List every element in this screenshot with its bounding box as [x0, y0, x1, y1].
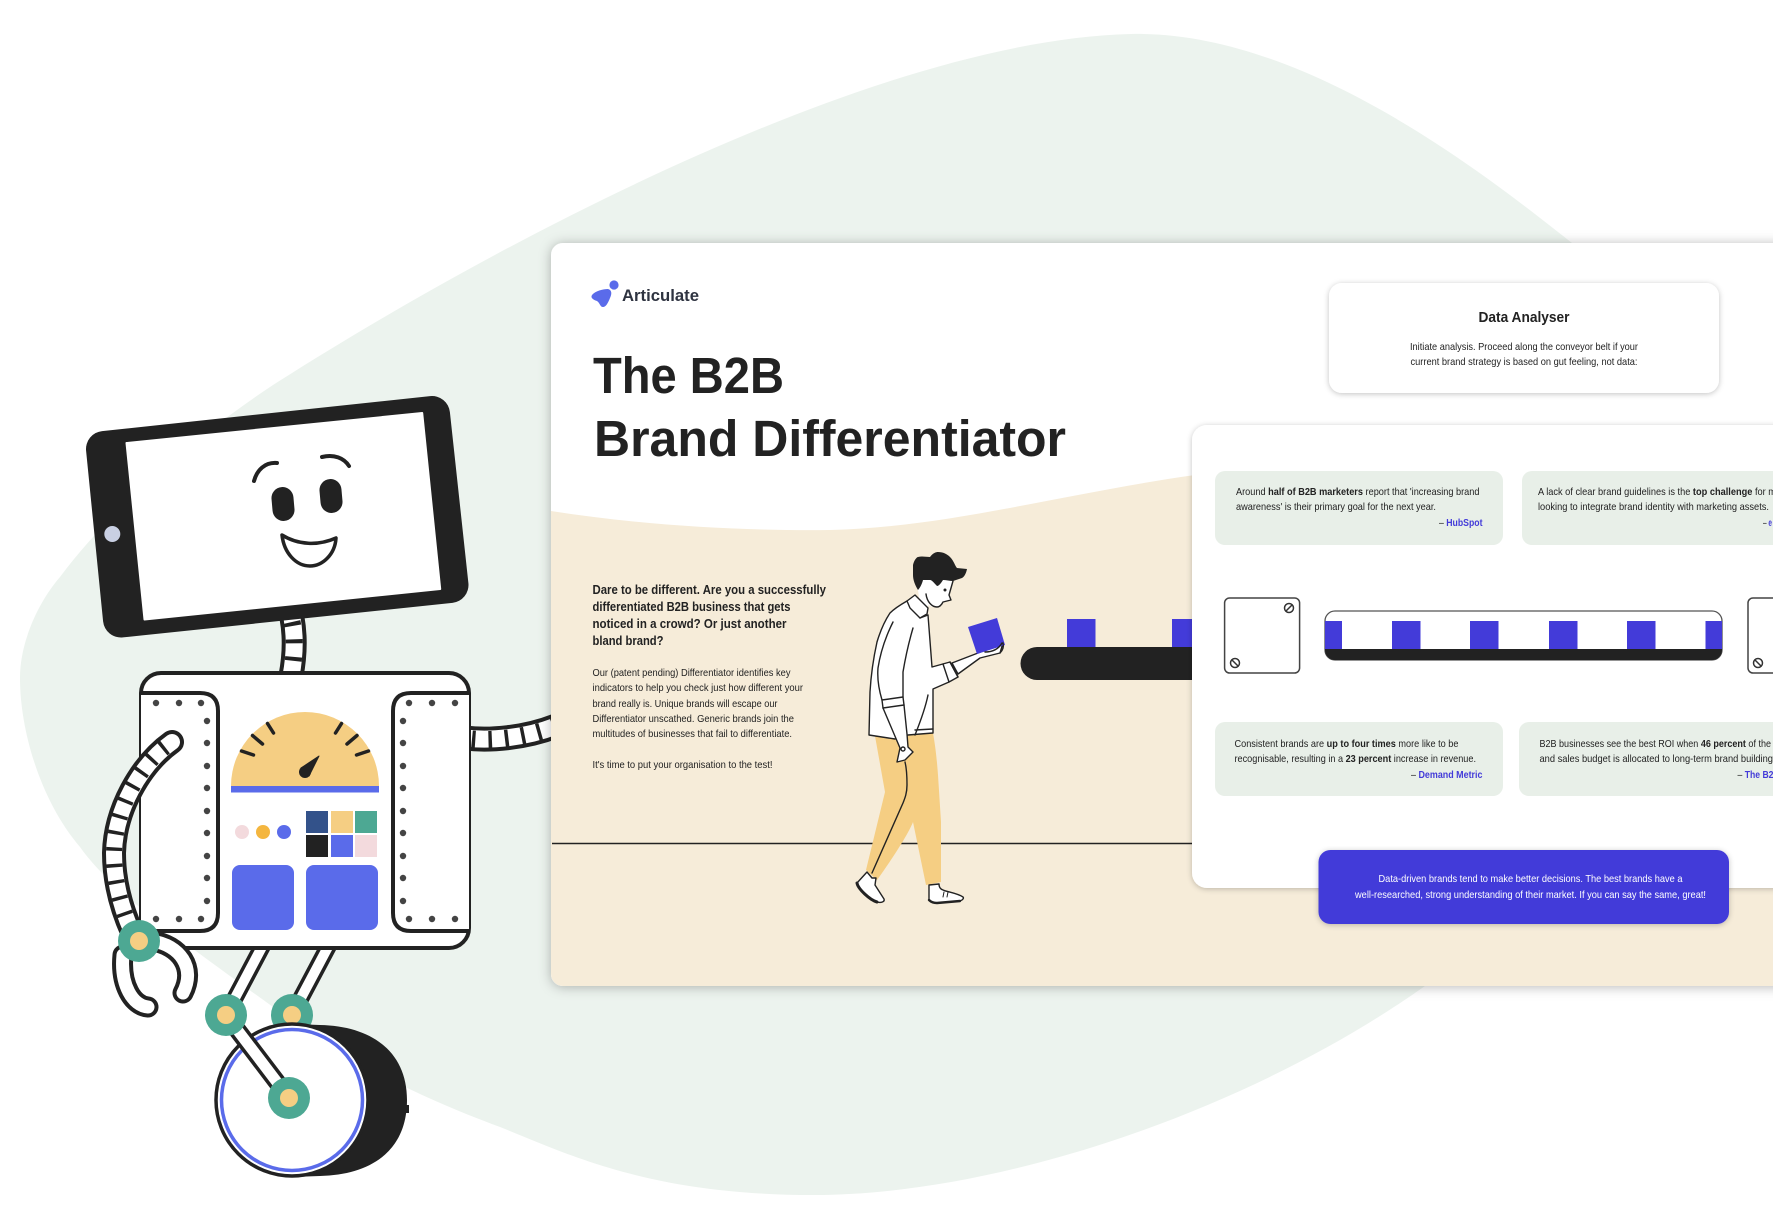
card text: current brand strategy is based on gut feeling, not data:	[1410, 356, 1638, 368]
title	[593, 347, 1066, 467]
intro lead text: differentiated B2B business that gets	[592, 599, 790, 614]
stat box: HubSpot: Around half of B2B marketers report that 'increasing brand	[1236, 486, 1480, 498]
rear leg joint	[271, 994, 313, 1036]
intro lead text: bland brand?	[592, 633, 664, 648]
shirt folds	[878, 622, 933, 735]
stat box: ROI: B2B businesses see the best ROI when 46 percent of the	[1540, 738, 1771, 750]
stat box: brand guidelines: A lack of clear brand guidelines is the top challenge for m	[1538, 486, 1773, 498]
intro body text: brand really is. Unique brands will escape our	[592, 698, 778, 710]
conclusion callout	[1318, 850, 1729, 924]
robot neck	[291, 618, 294, 676]
arm joint	[118, 920, 160, 962]
conclusion callout: well-researched, strong understanding of their market. If you can say the same, great!	[1354, 889, 1706, 901]
ground line	[552, 842, 1192, 844]
robot body	[141, 673, 469, 948]
stat box: HubSpot: – HubSpot	[1439, 517, 1483, 529]
shirt	[869, 601, 958, 739]
robot wheel	[216, 1024, 409, 1177]
intro body text: It's time to put your organisation to the test!	[592, 759, 772, 771]
card text	[1410, 341, 1638, 368]
forearm and hand	[952, 643, 1003, 674]
robot right arm	[465, 726, 556, 740]
leg joints	[205, 994, 310, 1119]
stat box: Demand Metric: recognisable, resulting in a 23 percent increase in revenue.	[1234, 753, 1476, 765]
stat box: Demand Metric: Consistent brands are up to four times more like to be	[1234, 738, 1459, 750]
robot left arm and claw	[114, 742, 188, 1007]
stat box: brand guidelines	[1522, 471, 1773, 545]
blue buttons	[232, 865, 378, 930]
hanging arm and hand	[882, 697, 913, 762]
right side panel	[393, 693, 469, 931]
right machine housing	[1748, 598, 1773, 673]
intro lead text: noticed in a crowd? Or just another	[592, 616, 786, 631]
conclusion callout: Data-driven brands tend to make better decisions. The best brands have a	[1378, 873, 1683, 885]
cream wave background	[551, 470, 1773, 990]
left machine housing	[1225, 598, 1300, 673]
intro body text	[592, 667, 803, 771]
hair	[913, 552, 967, 590]
collar	[907, 595, 928, 618]
intro lead text: Dare to be different. Are you a successfully	[592, 582, 827, 597]
logo	[591, 280, 699, 307]
robot head: tablet	[104, 413, 450, 620]
conveyor belt start	[1021, 619, 1194, 680]
data analyser card	[1329, 283, 1719, 393]
main panel	[551, 243, 1773, 990]
title: The B2B	[593, 347, 784, 404]
blue box	[968, 618, 1005, 654]
shoes	[857, 872, 884, 902]
neck and face	[918, 578, 953, 608]
card text: Initiate analysis. Proceed along the conveyor belt if your	[1410, 341, 1638, 353]
stat box: HubSpot: awareness' is their primary goal for the next year.	[1236, 501, 1436, 513]
indicator lights	[235, 825, 291, 839]
stat box: ROI	[1519, 722, 1773, 796]
intro body text: Our (patent pending) Differentiator identifies key	[592, 667, 791, 679]
robot face	[254, 456, 349, 566]
robot	[104, 413, 556, 1177]
card heading: Data Analyser	[1478, 310, 1570, 326]
gauge	[231, 712, 379, 792]
stat box: HubSpot	[1215, 471, 1503, 545]
robot legs	[226, 945, 329, 1015]
stat box: Demand Metric: – Demand Metric	[1411, 769, 1483, 781]
person holding box	[857, 552, 1005, 903]
wheel strut	[226, 1015, 289, 1098]
intro lead text	[592, 582, 827, 648]
title: Brand Differentiator	[594, 410, 1066, 467]
conveyor belt with blocks	[1325, 611, 1722, 660]
trousers	[866, 733, 941, 885]
analyser machine card	[1192, 425, 1773, 888]
intro body text: indicators to help you check just how different your	[592, 682, 803, 694]
colour swatches	[306, 811, 377, 857]
left side panel	[141, 693, 218, 931]
stat box: Demand Metric	[1215, 722, 1503, 796]
intro body text: multitudes of businesses that fail to differentiate.	[592, 728, 792, 740]
logo: Articulate	[622, 286, 699, 305]
intro body text: Differentiator unscathed. Generic brands join the	[592, 713, 794, 725]
